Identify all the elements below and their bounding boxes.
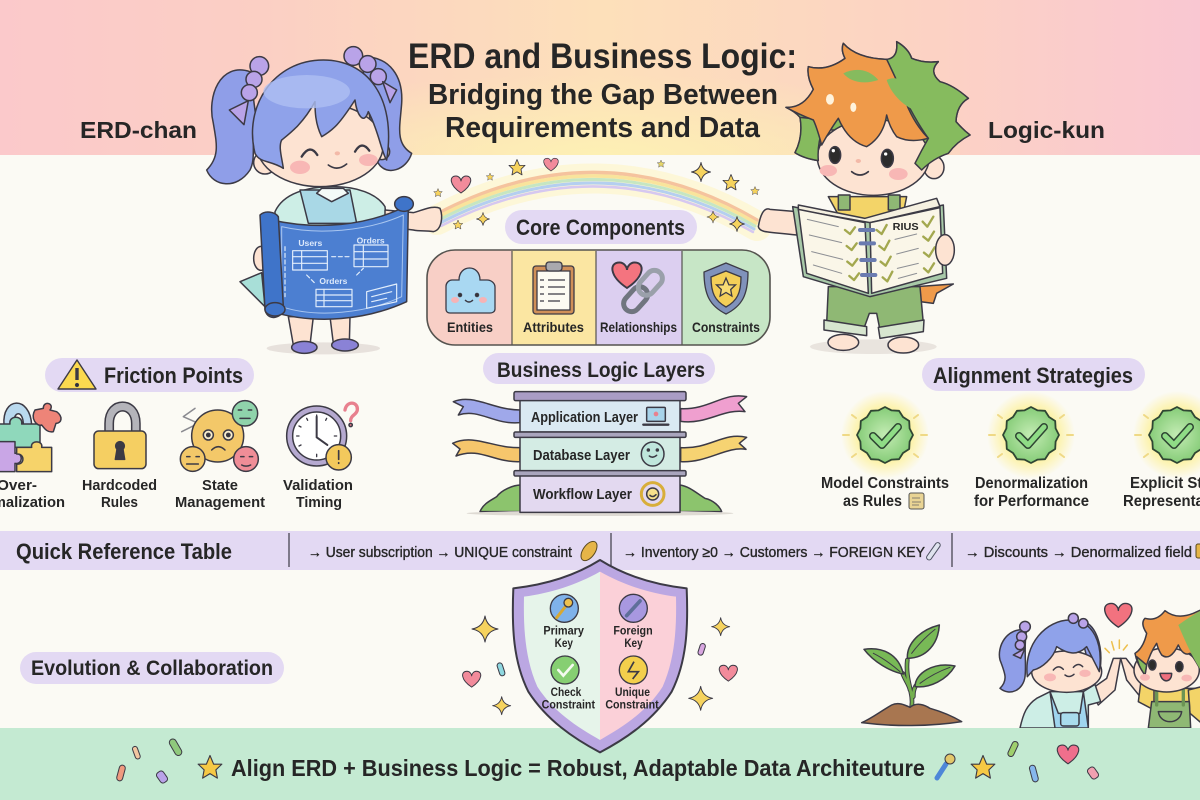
shield labels: Primary: [543, 624, 584, 637]
icon: clipped marker: [1196, 544, 1200, 558]
icon: check constraint: [551, 656, 579, 684]
label: Logic-kun: Logic-kun: [988, 117, 1105, 143]
strategy label: denormalization: Denormalization: [975, 475, 1088, 492]
layer labels: [531, 409, 638, 503]
shield labels: Unique: [615, 686, 650, 699]
icon: small rule sheet: [909, 493, 924, 509]
heading: Alignment Strategies: Alignment Strategies: [933, 363, 1133, 388]
shield: key constraints: [463, 560, 737, 752]
shield labels: Key: [624, 637, 643, 650]
footer message: Align ERD + Business Logic = Robust, Adaptable Data Architeuture: [231, 755, 925, 781]
panel: quick reference table: → Discounts → Denormalized field: [965, 545, 1192, 561]
title: [408, 37, 797, 144]
icon: gold star left: [198, 756, 222, 778]
icon: worried faces (state management): [180, 401, 258, 471]
strategy badge: model constraints: [841, 391, 929, 479]
icon: heart and chain: [612, 262, 666, 315]
layer labels: Database Layer: [533, 447, 630, 464]
shield body: [513, 560, 687, 752]
shield labels: Key: [555, 637, 573, 650]
label: hardcoded rules: Rules: [101, 494, 138, 511]
shield labels: Constraint: [605, 698, 659, 711]
icon: sprout: [862, 625, 962, 726]
strategy label: model constraints: Model Constraints: [821, 475, 949, 492]
layer icons: [641, 407, 668, 505]
label: over-normalization: [0, 477, 65, 511]
icon: warning triangle: [58, 360, 96, 389]
character: ERD-chan holding blueprint: [207, 47, 442, 354]
strategy label: model constraints: [821, 475, 949, 510]
strategy badge: explicit state: [1133, 391, 1200, 479]
icon: unique constraint: [619, 656, 647, 684]
footer confetti: [116, 738, 1100, 784]
label: validation timing: Timing: [296, 494, 342, 511]
label: state management: State: [202, 477, 238, 494]
character: ERD-chan holding blueprint: Orders: [357, 235, 385, 245]
component labels: Constraints: [692, 319, 760, 335]
shield sparkles: [463, 616, 737, 715]
label: validation timing: [283, 477, 353, 511]
character: Logic-kun holding rule book: RIUS: [893, 222, 919, 233]
icon: entity: [446, 268, 495, 313]
heading: Friction Points: Friction Points: [104, 363, 243, 388]
panel: quick reference table: → User subscription → UNIQUE constraint: [308, 545, 572, 561]
title: ERD and Business Logic:: [408, 37, 797, 76]
icon: foreign key: [619, 594, 647, 622]
heading: Core Components: Core Components: [516, 215, 685, 240]
icon: key: [937, 754, 955, 778]
strategy label: model constraints: as Rules: [843, 493, 902, 510]
panel: quick reference table: → Inventory ≥0 → Customers → FOREIGN KEY: [623, 545, 925, 561]
strategy badge: denormalization: [987, 391, 1075, 479]
ribbons: [453, 396, 747, 462]
heading: Evolution & Collaboration: Evolution & Collaboration: [31, 657, 273, 680]
footer band: [0, 728, 1200, 800]
heading: Core Components: [505, 210, 697, 244]
panel: quick reference table: [0, 531, 1200, 570]
rainbow bridge: [437, 172, 757, 232]
character: Logic-kun holding rule book: [758, 42, 970, 354]
icon: constraint shield: [704, 263, 748, 314]
illustration: high five: [999, 603, 1200, 728]
icon: primary key: [550, 594, 578, 622]
panel: core components: [427, 250, 770, 345]
strategy label: denormalization: for Performance: [974, 493, 1089, 510]
component cells: [427, 250, 770, 345]
label: state management: Management: [175, 494, 265, 511]
icon: clock (validation timing): [287, 403, 357, 470]
icon: gold star right: [971, 756, 995, 778]
shield labels: Check: [551, 686, 582, 699]
layer labels: Workflow Layer: [533, 486, 632, 503]
header band: [0, 0, 1200, 155]
icon: link: [926, 542, 941, 561]
rainbow sparkles: [434, 158, 759, 232]
label: hardcoded rules: [82, 477, 157, 511]
component labels: Entities: [447, 319, 493, 335]
shield labels: [542, 624, 659, 711]
label: ERD-chan: ERD-chan: [80, 117, 197, 143]
shield labels: Constraint: [542, 698, 595, 711]
layer boxes: [514, 392, 686, 512]
character: ERD-chan holding blueprint: Users: [298, 238, 323, 248]
label: state management: [175, 477, 265, 511]
component labels: Relationships: [600, 319, 677, 335]
icon: puzzle pieces (over-normalization): [0, 403, 61, 472]
component labels: Attributes: [523, 319, 584, 335]
label: validation timing: Validation: [283, 477, 353, 494]
component labels: [447, 319, 760, 335]
heading: Evolution & Collaboration: [20, 652, 284, 684]
label: hardcoded rules: Hardcoded: [82, 477, 157, 494]
heading: Friction Points: [45, 358, 254, 392]
strategy label: denormalization: [974, 475, 1089, 510]
icon: clipboard: [533, 262, 574, 314]
heading: Business Logic Layers: [483, 353, 715, 384]
strategy label: explicit state: [1123, 475, 1200, 510]
title: Bridging the Gap Between: [428, 79, 778, 111]
shield labels: Foreign: [613, 624, 653, 637]
character: ERD-chan holding blueprint: Orders: [319, 276, 348, 286]
panel: quick reference table: Quick Reference Table: [16, 539, 232, 564]
title: Requirements and Data: [445, 112, 761, 144]
bushes: [480, 485, 722, 512]
layer labels: Application Layer: [531, 409, 638, 426]
icon: gold key: [578, 539, 600, 563]
icon: padlock (hardcoded rules): [94, 402, 146, 469]
layer stack: [453, 392, 747, 516]
heading: Business Logic Layers: Business Logic Layers: [497, 359, 705, 382]
